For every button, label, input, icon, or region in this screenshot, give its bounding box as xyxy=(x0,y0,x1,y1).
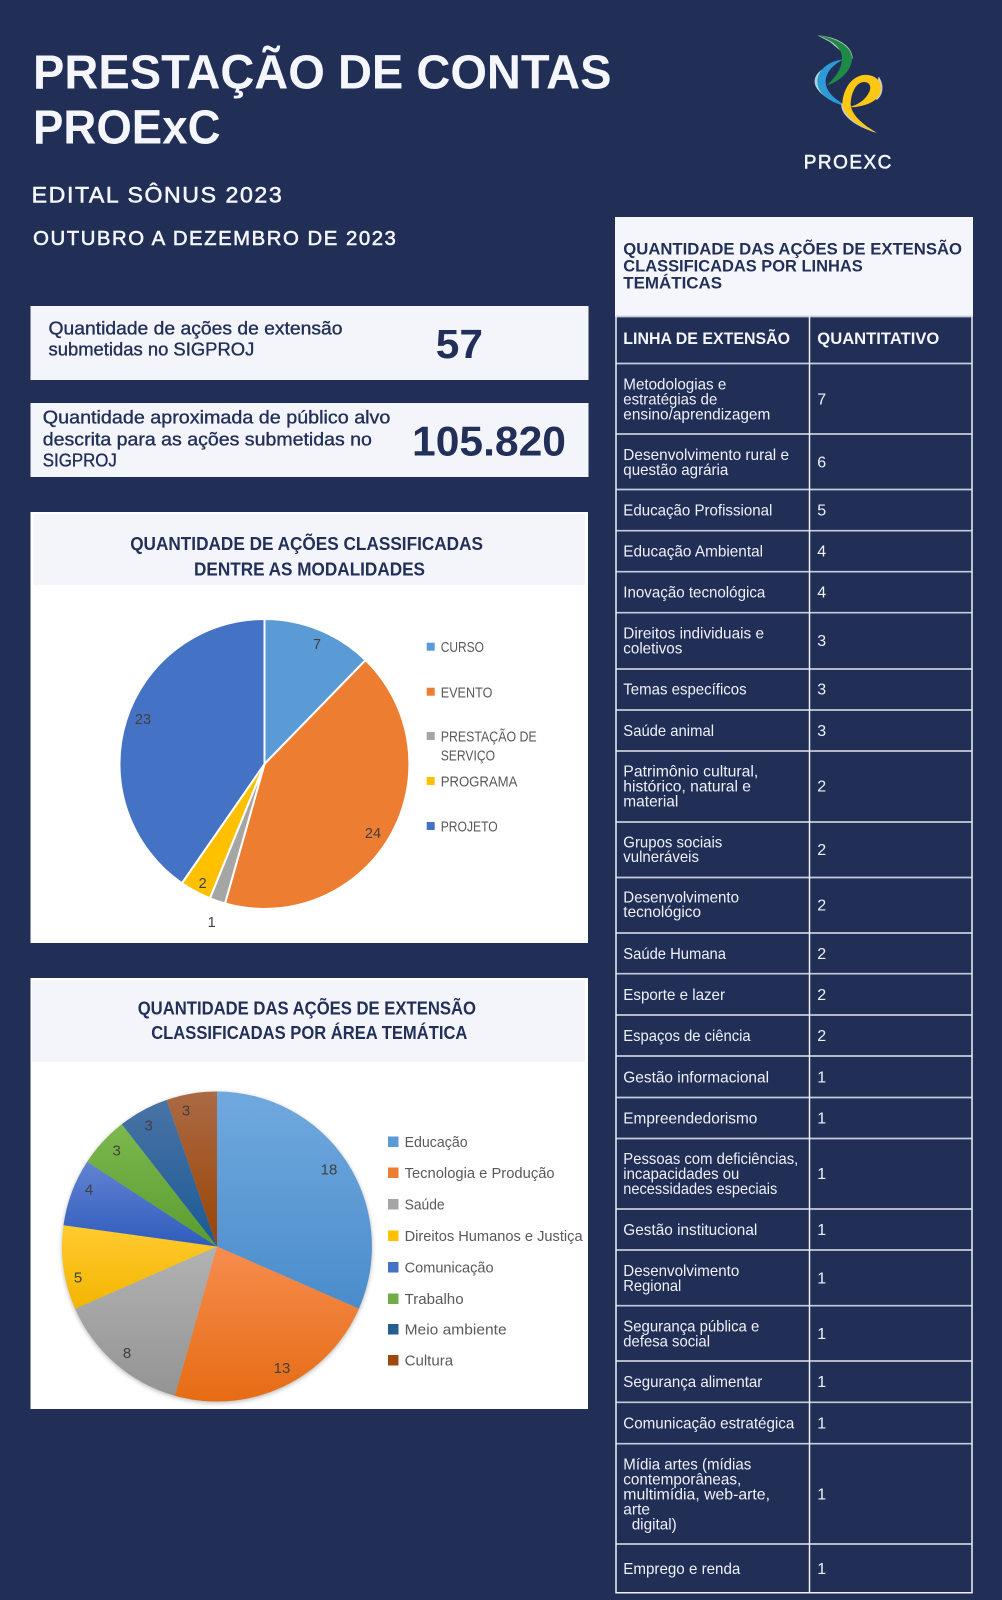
row: Educação Ambiental: Educação Ambiental xyxy=(623,544,763,560)
row: Segurança pública: Segurança pública e xyxy=(623,1318,759,1335)
row: Segurança pública: 1 xyxy=(817,1326,826,1343)
text: submitted actions xyxy=(48,318,342,360)
row: Mídia artes: arte xyxy=(623,1501,650,1518)
pie labels: 18 xyxy=(321,1162,337,1178)
row: Direitos individuais: 3 xyxy=(817,633,826,650)
row: Educação Profissional: 5 xyxy=(817,502,826,520)
row: Pessoas com deficiências: Pessoas com deficiências, xyxy=(623,1151,798,1168)
number: 57: 57 xyxy=(436,321,483,367)
legend: thematic area: Direitos Humanos e Justiça xyxy=(405,1228,583,1245)
text: target audience: SIGPROJ xyxy=(43,450,117,470)
row: Metodologias: Metodologias e xyxy=(623,376,726,393)
text: submitted actions: submetidas no SIGPROJ xyxy=(48,340,254,360)
row: Patrimônio xyxy=(623,764,826,811)
pie labels: 1 xyxy=(208,915,216,931)
row: Patrimônio: Patrimônio cultural, xyxy=(623,764,758,781)
row: Desenvolvimento Regional: Regional xyxy=(623,1278,681,1295)
row: Grupos sociais xyxy=(623,834,826,866)
row: Esporte e lazer: 2 xyxy=(817,987,826,1004)
heading: modalities: QUANTIDADE DE AÇÕES CLASSIFICADAS xyxy=(130,533,483,554)
subtitle: edital: EDITAL SÔNUS 2023 xyxy=(32,182,283,207)
table header row: LINHA DE EXTENSÃO xyxy=(623,328,790,348)
legend: modalities: PROJETO xyxy=(441,818,498,836)
row: Temas específicos: 3 xyxy=(817,682,826,698)
row: Direitos individuais: Direitos individuais e xyxy=(623,626,764,642)
pie labels: 8 xyxy=(123,1345,131,1362)
legend: thematic area: Saúde xyxy=(405,1196,445,1214)
pie labels xyxy=(135,637,381,931)
row: Mídia artes: 1 xyxy=(817,1486,826,1503)
row: Metodologias: ensino/aprendizagem xyxy=(623,406,770,423)
row: Gestão institucional: 1 xyxy=(817,1222,826,1239)
panel: thematic area chart xyxy=(30,978,588,1409)
row: Saúde Humana: Saúde Humana xyxy=(623,946,726,963)
panel: submitted actions xyxy=(30,306,588,380)
row: Comunicação estratégica: 1 xyxy=(817,1415,826,1432)
row: Esporte e lazer: Esporte e lazer xyxy=(623,987,726,1004)
panel: thematic lines table xyxy=(615,217,973,1593)
row: Saúde animal xyxy=(623,723,826,740)
subtitle: period: OUTUBRO A DEZEMBRO DE 2023 xyxy=(33,228,397,250)
title: PROExC xyxy=(33,102,220,154)
row: Gestão institucional: Gestão institucional xyxy=(623,1222,757,1239)
text: target audience xyxy=(43,408,390,470)
row: Segurança alimentar: 1 xyxy=(817,1374,826,1391)
row: Mídia artes: multimídia, web-arte, xyxy=(623,1486,770,1503)
pie labels: 3 xyxy=(145,1118,153,1134)
heading: modalities: DENTRE AS MODALIDADES xyxy=(194,558,425,579)
table header row: QUANTITATIVO xyxy=(817,329,939,348)
legend: thematic area: Comunicação xyxy=(405,1260,494,1276)
row: Pessoas com deficiências: necessidades especiais xyxy=(623,1181,777,1198)
pie labels: 3 xyxy=(182,1102,190,1120)
row: Espaços de ciência: Espaços de ciência xyxy=(623,1028,751,1045)
row: Mídia artes: contemporâneas, xyxy=(623,1471,741,1488)
legend: thematic area: Tecnologia e Produção xyxy=(405,1165,555,1182)
row: Emprego e renda: 1 xyxy=(817,1561,826,1578)
logo wordmark: PROEXC xyxy=(804,151,893,173)
row: Gestão informacional: 1 xyxy=(817,1070,826,1086)
pie chart: thematic area xyxy=(62,1092,372,1402)
logo: PROEXC xyxy=(804,35,893,173)
row: Desenvolvimento tecnológico: tecnológico xyxy=(623,904,701,921)
table heading: QUANTIDADE DAS AÇÕES DE EXTENSÃO xyxy=(623,238,962,258)
row: Desenvolvimento Regional xyxy=(623,1263,826,1295)
row: Direitos individuais xyxy=(623,626,826,658)
row: Direitos individuais: coletivos xyxy=(623,640,682,658)
legend: modalities: CURSO xyxy=(441,639,484,656)
row: Metodologias xyxy=(623,376,826,423)
row: Mídia artes: Mídia artes (mídias xyxy=(623,1456,751,1473)
row: Patrimônio: histórico, natural e xyxy=(623,779,751,796)
row: Temas específicos: Temas específicos xyxy=(623,682,747,698)
row: Temas específicos xyxy=(623,682,826,698)
row: Mídia artes xyxy=(623,1456,826,1533)
pie labels: 7 xyxy=(313,637,321,653)
pie labels: 23 xyxy=(135,712,151,728)
legend: thematic area: Trabalho xyxy=(405,1291,464,1308)
legend: modalities: PRESTAÇÃO DE xyxy=(441,728,537,745)
number: 105.820: 105.820 xyxy=(412,418,566,465)
row: Empreendedorismo xyxy=(623,1110,826,1128)
table heading xyxy=(623,238,962,293)
row: Emprego e renda: Emprego e renda xyxy=(623,1561,740,1578)
row: Educação Ambiental: 4 xyxy=(817,544,826,560)
panel: target audience xyxy=(30,403,588,477)
pie labels: 5 xyxy=(74,1270,82,1286)
legend: modalities: PROGRAMA xyxy=(441,774,517,790)
row: Comunicação estratégica: Comunicação estratégica xyxy=(623,1415,794,1432)
pie labels: 3 xyxy=(113,1142,121,1160)
row: Grupos sociais: Grupos sociais xyxy=(623,834,722,851)
row: Desenvolvimento Regional: 1 xyxy=(817,1270,826,1287)
legend: modalities xyxy=(427,639,537,836)
heading: modalities xyxy=(130,533,483,579)
heading: thematic area xyxy=(138,997,476,1043)
row: Espaços de ciência xyxy=(623,1028,826,1045)
heading: thematic area: CLASSIFICADAS POR ÁREA TEMÁTICA xyxy=(151,1022,467,1043)
pie labels: 24 xyxy=(365,826,381,842)
pie labels: 13 xyxy=(274,1360,290,1377)
pie labels: 2 xyxy=(199,876,207,892)
pie chart: modalities xyxy=(119,619,409,909)
row: Saúde Humana: 2 xyxy=(817,946,826,963)
row: Metodologias: estratégias de xyxy=(623,391,717,408)
row: Mídia artes: digital) xyxy=(632,1516,677,1533)
row: Desenvolvimento rural: questão agrária xyxy=(623,462,728,479)
row: Saúde animal: Saúde animal xyxy=(623,723,714,740)
row: Segurança alimentar: Segurança alimentar xyxy=(623,1374,763,1391)
row: Segurança pública: defesa social xyxy=(623,1333,710,1350)
text: target audience: descrita para as ações submetidas no xyxy=(43,429,372,449)
text: submitted actions: Quantidade de ações de extensão xyxy=(48,318,342,338)
legend: modalities: EVENTO xyxy=(441,684,492,702)
row: Metodologias: 7 xyxy=(817,391,826,408)
legend: thematic area xyxy=(388,1134,583,1370)
legend: thematic area: Educação xyxy=(405,1134,468,1151)
text: target audience: Quantidade aproximada de público alvo xyxy=(43,408,390,428)
table heading: CLASSIFICADAS POR LINHAS xyxy=(623,257,863,276)
row: Espaços de ciência: 2 xyxy=(817,1028,826,1045)
row: Saúde Humana xyxy=(623,946,826,963)
row: Saúde animal: 3 xyxy=(817,723,826,740)
row: Desenvolvimento tecnológico: 2 xyxy=(817,898,826,914)
legend: thematic area: Meio ambiente xyxy=(405,1322,507,1338)
row: Inovação tecnológica: 4 xyxy=(817,584,826,602)
row: Educação Profissional: Educação Profissional xyxy=(623,502,772,520)
table heading: TEMÁTICAS xyxy=(623,274,722,293)
row: Patrimônio: material xyxy=(623,794,678,811)
row: Gestão informacional: Gestão informacional xyxy=(623,1070,769,1086)
row: Grupos sociais: 2 xyxy=(817,842,826,859)
pie labels xyxy=(74,1102,337,1377)
row: Pessoas com deficiências: 1 xyxy=(817,1166,826,1183)
row: Grupos sociais: vulneráveis xyxy=(623,849,699,866)
heading: thematic area: QUANTIDADE DAS AÇÕES DE EXTENSÃO xyxy=(138,997,476,1018)
row: Pessoas com deficiências xyxy=(623,1151,826,1198)
icon: ribbons xyxy=(815,35,882,133)
row: Inovação tecnológica: Inovação tecnológica xyxy=(623,584,765,602)
row: Desenvolvimento rural: 6 xyxy=(817,454,826,471)
row: Desenvolvimento tecnológico xyxy=(623,889,826,921)
row: Pessoas com deficiências: incapacidades ou xyxy=(623,1166,739,1183)
row: Desenvolvimento tecnológico: Desenvolvimento xyxy=(623,889,739,906)
title: PRESTAÇÃO DE CONTAS xyxy=(33,44,612,100)
pie labels: 4 xyxy=(85,1182,93,1198)
row: Desenvolvimento Regional: Desenvolvimento xyxy=(623,1263,739,1280)
row: Emprego e renda xyxy=(623,1561,826,1578)
row: Segurança pública xyxy=(623,1318,826,1350)
row: Empreendedorismo: Empreendedorismo xyxy=(623,1110,757,1128)
row: Desenvolvimento rural xyxy=(623,447,826,479)
row: Gestão institucional xyxy=(623,1222,826,1239)
row: Patrimônio: 2 xyxy=(817,779,826,796)
panel: modalities chart xyxy=(30,512,588,943)
table header row xyxy=(623,328,939,348)
row: Empreendedorismo: 1 xyxy=(817,1110,826,1128)
row: Desenvolvimento rural: Desenvolvimento rural e xyxy=(623,447,789,464)
legend: thematic area: Cultura xyxy=(405,1352,454,1370)
legend: modalities: SERVIÇO xyxy=(441,748,495,765)
title xyxy=(33,44,612,154)
row: Esporte e lazer xyxy=(623,987,826,1004)
